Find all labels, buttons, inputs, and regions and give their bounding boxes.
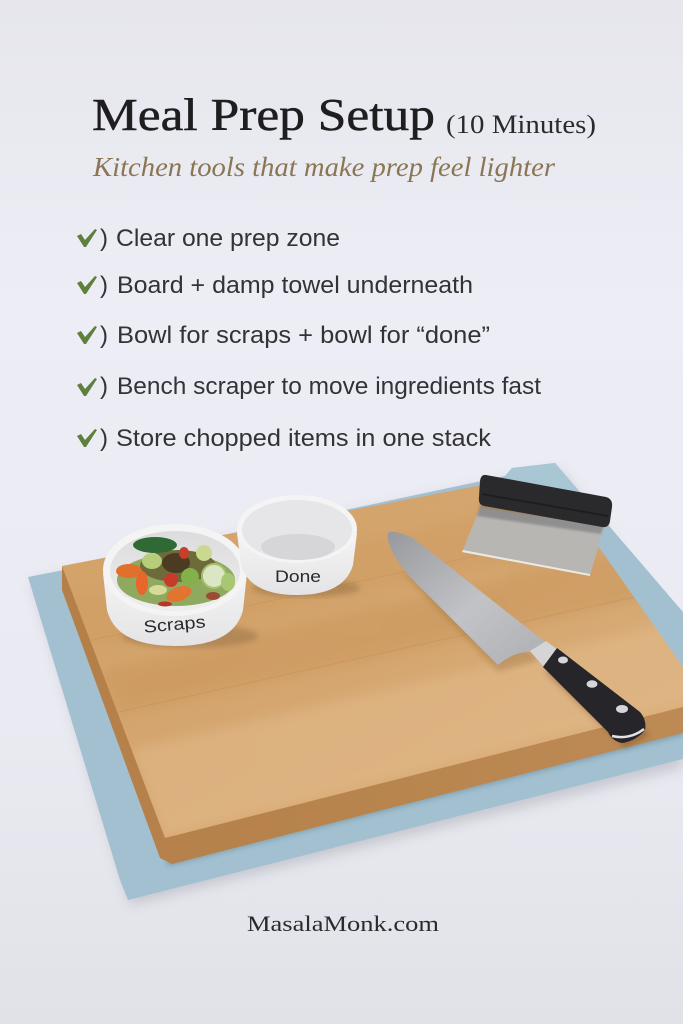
item: clear zone: ) — [100, 225, 108, 252]
knife rivets — [558, 656, 628, 713]
checklist — [77, 225, 541, 452]
item: bench scraper: Bench scraper to move ingredients fast — [117, 373, 541, 400]
item: board and towel: Board + damp towel underneath — [117, 272, 473, 299]
item: store: ) — [100, 425, 108, 452]
item: bench scraper: ) — [100, 373, 108, 400]
board side face — [62, 566, 683, 864]
bowl body — [103, 573, 247, 646]
item: bowls: ) — [100, 322, 108, 349]
scraper handle — [479, 475, 612, 527]
bench scraper — [462, 475, 612, 576]
knife blade — [388, 532, 545, 665]
title: (10 Minutes) — [446, 110, 596, 139]
towel — [28, 463, 683, 905]
knife bolster — [530, 641, 558, 666]
title — [92, 89, 596, 140]
bowl label: done: Done — [275, 568, 321, 586]
bowl label: scraps: Scraps — [143, 612, 206, 637]
footer website: MasalaMonk.com — [247, 911, 439, 936]
bowl: scraps — [103, 524, 258, 648]
scraper blade — [462, 508, 604, 576]
item: bowls: Bowl for scraps + bowl for “done” — [117, 322, 490, 349]
salad — [116, 537, 235, 606]
knife handle — [543, 648, 645, 743]
cutting board — [62, 485, 683, 866]
board top face — [62, 485, 683, 838]
chef's knife — [388, 532, 650, 748]
title: Meal Prep Setup — [92, 89, 435, 140]
subtitle: Kitchen tools that make prep feel lighter — [92, 152, 556, 182]
item: board and towel: ) — [100, 272, 108, 299]
item: store: Store chopped items in one stack — [116, 425, 492, 452]
item: clear zone: Clear one prep zone — [116, 225, 340, 252]
bowl: done — [237, 495, 360, 597]
